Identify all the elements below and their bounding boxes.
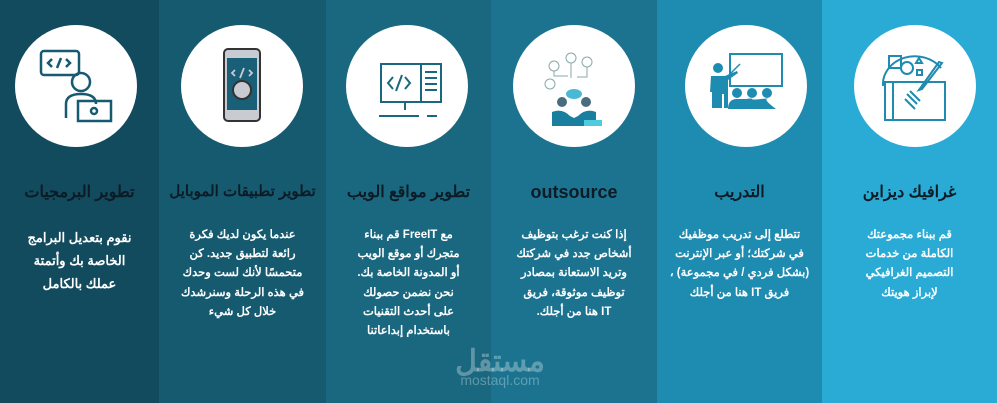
- text: توظيف موثوقة، فريق: [523, 287, 625, 299]
- text: تتطلع إلى تدريب موظفيك: [679, 229, 800, 241]
- icon: developer: [15, 25, 137, 147]
- text: نحن نضمن حصولك: [363, 287, 454, 299]
- panel: web development: [326, 0, 491, 403]
- text: مع FreeIT قم ببناء: [364, 229, 453, 241]
- text: في هذه الرحلة وسنرشدك: [181, 287, 304, 299]
- panel: mobile apps: [159, 0, 326, 403]
- title: تطوير البرمجيات: [24, 184, 135, 201]
- icon: presentation: [685, 25, 807, 147]
- panel: graphic design: [822, 0, 997, 403]
- text: وتريد الاستعانة بمصادر: [521, 267, 627, 279]
- text: [866, 229, 953, 300]
- panel: software development: [0, 0, 159, 403]
- title: تطوير مواقع الويب: [347, 184, 470, 201]
- text: [28, 230, 131, 291]
- text: لإبراز هويتك: [881, 287, 938, 299]
- text: فريق IT هنا من أجلك: [690, 287, 789, 299]
- icon: drawing tablet: [854, 25, 976, 147]
- watermark: mostaql logo: مستقل: [455, 336, 545, 380]
- text: قم ببناء مجموعتك: [867, 229, 952, 241]
- text: متجرك أو موقع الويب: [357, 248, 460, 260]
- text: في شركتك؛ أو عبر الإنترنت: [675, 248, 804, 260]
- text: التصميم الغرافيكي: [866, 267, 953, 279]
- text: الكاملة من خدمات: [866, 248, 953, 260]
- watermark: mostaql logo: mostaql.com: [460, 372, 540, 388]
- text: عملك بالكامل: [43, 276, 116, 291]
- title: التدريب: [714, 184, 765, 201]
- text: باستخدام إبداعاتنا: [367, 325, 450, 337]
- text: الخاصة بك وأتمتة: [34, 253, 125, 268]
- title: outsource: [530, 182, 618, 202]
- text: [670, 229, 809, 299]
- text: إذا كنت ترغب بتوظيف: [521, 229, 627, 241]
- icon: phone: [181, 25, 303, 147]
- text: [516, 228, 632, 318]
- text: [357, 229, 460, 338]
- text: رائعة لتطبيق جديد. كن: [190, 248, 296, 260]
- text: على أحدث التقنيات: [363, 306, 454, 318]
- text: عندما يكون لديك فكرة: [189, 229, 296, 241]
- text: أو المدونة الخاصة بك.: [357, 267, 460, 279]
- text: أشخاص جدد في شركتك: [516, 248, 632, 260]
- panel: training: [657, 0, 822, 403]
- icon: handshake: [513, 25, 635, 147]
- text: [181, 228, 304, 318]
- panel: outsource: [491, 0, 657, 403]
- icon: computer: [346, 25, 468, 147]
- text: IT هنا من أجلك.: [537, 306, 611, 318]
- title: غرافيك ديزاين: [863, 184, 956, 201]
- text: متحمسًا لأنك لست وحدك: [183, 267, 302, 279]
- text: نقوم بتعديل البرامج: [28, 230, 131, 245]
- text: خلال كل شيء: [209, 306, 276, 318]
- text: (بشكل فردي / في مجموعة) ،: [670, 267, 809, 279]
- title: تطوير تطبيقات الموبايل: [169, 183, 316, 200]
